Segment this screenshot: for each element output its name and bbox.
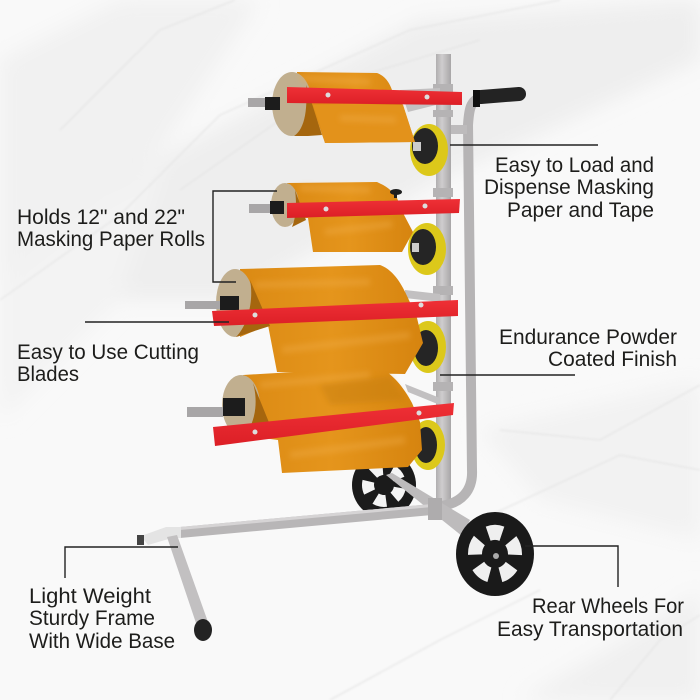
label: cutting blades [17,340,199,386]
label: load and dispense: Easy to Load and [495,153,654,177]
label: load and dispense: Dispense Masking [484,175,654,199]
label: load and dispense: Paper and Tape [507,198,654,222]
label: paper rolls [17,205,205,251]
label: powder coated finish: Coated Finish [548,347,677,371]
paper roll 2 [271,182,413,252]
base frame [137,473,470,626]
label: cutting blades: Easy to Use Cutting [17,340,199,364]
callout line: frame [65,547,178,578]
bar support brackets [400,88,440,405]
label: load and dispense [484,153,654,222]
handle cross brace [451,125,467,134]
roll axles [185,97,284,417]
rear wheel (front) [456,512,534,596]
paper roll 1 [272,72,415,143]
label: paper rolls: Holds 12" and 22" [17,205,185,229]
vertical post [433,54,453,506]
label: rear wheels [497,594,684,641]
red cutting blade 3 [212,300,458,326]
label: frame: With Wide Base [29,629,175,653]
paper roll 4 [222,367,422,473]
handle grip [473,90,519,107]
red cutting blade 1 [287,87,462,105]
callout line: powder coated finish [440,374,575,376]
label: rear wheels: Rear Wheels For [532,594,684,618]
tape roll 2 [408,223,446,275]
red cutting blade 2 [287,199,460,218]
label: powder coated finish [499,325,677,371]
label: frame: Sturdy Frame [29,606,155,630]
label: frame: Light Weight [29,584,151,608]
tape roll 3 [410,321,446,373]
label: cutting blades: Blades [17,362,79,386]
label: powder coated finish: Endurance Powder [499,325,677,349]
rear wheel (back) [352,465,416,510]
red cutting blade 4 [213,403,454,446]
callout line: load and dispense [450,144,598,146]
paper roll 3 [216,265,423,374]
label: rear wheels: Easy Transportation [497,617,683,641]
callout line: paper rolls [213,191,277,282]
leg foot [194,619,212,641]
callout line: cutting blades [85,321,229,323]
label: paper rolls: Masking Paper Rolls [17,227,205,251]
product: masking paper rack [137,54,534,641]
handle tube [441,97,482,506]
label: frame [29,584,175,653]
callout line: rear wheels [525,546,618,587]
tape roll 1 [410,124,448,176]
tape roll 4 [411,420,445,470]
